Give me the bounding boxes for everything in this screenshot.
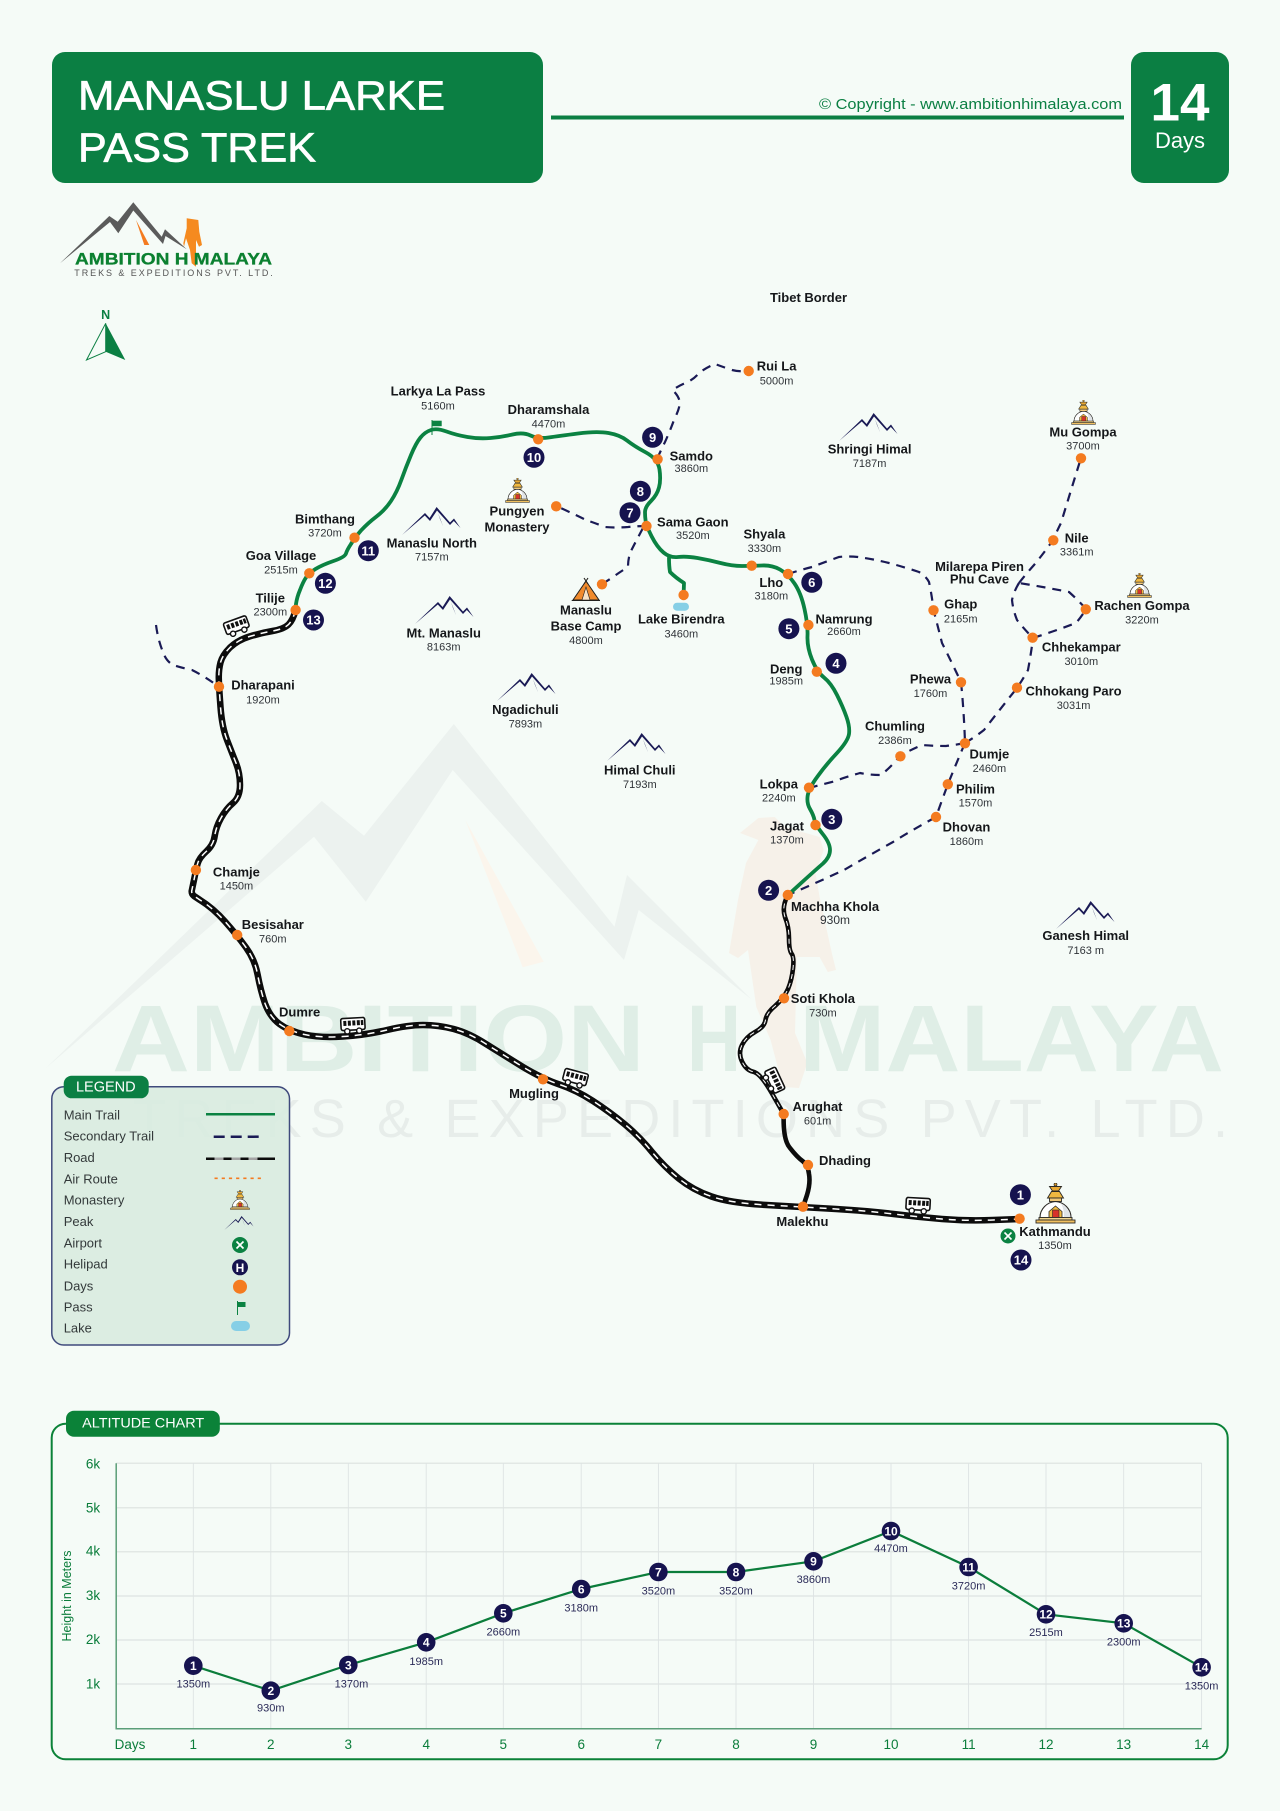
altitude points: 12: [1039, 1608, 1053, 1622]
title banner: MANASLU LARKE: [78, 72, 445, 118]
chart gridlines: [116, 1463, 1202, 1729]
label: Phewa: 1760m: [914, 688, 947, 700]
legend symbols: H: [236, 1261, 244, 1275]
title banner: [52, 52, 543, 183]
label: Ganesh Himal: Ganesh Himal: [1042, 928, 1129, 943]
logo: TREKS & EXPEDITIONS PVT. LTD.: [74, 268, 273, 278]
legend rows text: Pass: [64, 1299, 93, 1314]
label: Chamje: [213, 865, 260, 893]
x axis labels: 6: [577, 1737, 585, 1752]
day badges: 14: [1014, 1253, 1029, 1268]
y axis labels: 6k: [86, 1457, 100, 1472]
altitude values: 1350m: [176, 1678, 210, 1690]
label: Chumling: [865, 719, 925, 747]
x axis labels: 4: [422, 1737, 430, 1752]
label: Shyala: [743, 526, 786, 555]
label: Lokpa: Lokpa: [760, 776, 799, 791]
label: Machha Khola: 930m: [820, 913, 850, 927]
secondary trails: [156, 364, 1086, 895]
y axis labels: 3k: [86, 1588, 100, 1603]
label: Soti Khola: 730m: [809, 1007, 837, 1019]
label: Ganesh Himal: 7163 m: [1067, 945, 1104, 957]
x axis labels: 10: [883, 1737, 899, 1752]
altitude points: 13: [1117, 1617, 1131, 1631]
x axis labels: 13: [1116, 1737, 1131, 1752]
label: Mu Gompa: 3700m: [1066, 440, 1100, 452]
label: Shringi Himal: Shringi Himal: [828, 442, 911, 457]
label: Shyala: 3330m: [748, 543, 781, 555]
label: Dharapani: [231, 677, 295, 706]
altitude points: 1: [190, 1659, 197, 1673]
x axis labels: 9: [810, 1737, 817, 1752]
label: Soti Khola: [791, 991, 856, 1019]
icon: base camp tent: [572, 578, 600, 600]
title banner: PASS TREK: [78, 124, 316, 170]
label: Rui La: [757, 359, 797, 388]
watermark: mountain: [46, 724, 751, 1068]
label: Goa Village: [246, 548, 316, 576]
label: Manaslu North: Manaslu North: [387, 535, 477, 550]
label: Tilije: [253, 590, 287, 619]
label: Mu Gompa: Mu Gompa: [1049, 424, 1117, 439]
label: Besisahar: [242, 917, 304, 946]
label: Philim: Philim: [956, 781, 995, 796]
day badges: 12: [318, 576, 333, 591]
day badges: 7: [626, 505, 634, 520]
north arrow: N: [101, 308, 110, 322]
label: Namrung: [815, 611, 873, 638]
label: Jagat: Jagat: [770, 818, 805, 833]
label: Phewa: Phewa: [910, 672, 952, 687]
label: Dharamshala: Dharamshala: [508, 402, 590, 417]
altitude values: 3520m: [719, 1586, 753, 1598]
label: Lake Birendra: [638, 611, 725, 640]
chart tab: ALTITUDE CHART: [82, 1416, 204, 1431]
label: Sama Gaon: [657, 514, 729, 542]
x axis labels: 5: [500, 1737, 507, 1752]
label: Dhovan: [943, 820, 990, 848]
legend rows text: Helipad: [64, 1256, 108, 1271]
label: Chhokang Paro: Chhokang Paro: [1026, 684, 1122, 699]
altitude values: 2660m: [486, 1627, 520, 1639]
label: Kathmandu: 1350m: [1038, 1240, 1072, 1252]
label: Sama Gaon: 3520m: [676, 530, 710, 542]
legend symbols: [206, 1114, 275, 1331]
altitude points: 11: [962, 1560, 975, 1574]
label: Arughat: 601m: [804, 1115, 831, 1127]
label: Larkya La Pass: Larkya La Pass: [391, 384, 485, 399]
day badges: 3: [828, 812, 835, 827]
label: Samdo: [670, 448, 713, 475]
label: Milarepa Piren Phu Cave: Phu Cave: [950, 572, 1009, 587]
days badge: [1131, 52, 1229, 183]
altitude values: [176, 1543, 1218, 1714]
days badge: Days: [1155, 128, 1205, 153]
copyright text: © Copyright - www.ambitionhimalaya.com: [819, 96, 1122, 113]
chart tab: [66, 1411, 220, 1437]
label: Larkya La Pass: [391, 384, 485, 412]
label: Namrung: Namrung: [815, 611, 873, 626]
label: Chamje: 1450m: [220, 881, 253, 893]
label: Ngadichuli: [492, 702, 559, 731]
altitude values: 2515m: [1029, 1627, 1063, 1639]
altitude points: 4: [423, 1636, 430, 1650]
label: Mt. Manaslu: Mt. Manaslu: [406, 625, 481, 640]
y axis labels: Height in Meters: [60, 1550, 74, 1642]
north arrow: [86, 308, 125, 360]
watermark: company subtitle: TREKS & EXPEDITIONS PVT. LTD.: [133, 1089, 1228, 1149]
icons: peaks: [402, 413, 1114, 929]
label: Lho: [754, 575, 788, 603]
icon: pass flag: [432, 420, 442, 435]
logo: [60, 202, 273, 278]
legend rows text: Monastery: [64, 1193, 125, 1208]
legend rows text: Secondary Trail: [64, 1129, 154, 1144]
altitude points: 7: [655, 1565, 662, 1579]
day badges: 4: [832, 656, 840, 671]
label: Shyala: Shyala: [743, 526, 786, 541]
label: Lokpa: 2240m: [762, 793, 796, 805]
watermark: company name: MALAYA: [799, 986, 1224, 1092]
label: Samdo: Samdo: [670, 448, 713, 463]
label: Philim: 1570m: [959, 798, 992, 810]
label: Dumje: 2460m: [973, 763, 1006, 775]
altitude values: 3860m: [797, 1574, 830, 1586]
altitude points: 5: [500, 1607, 507, 1621]
legend rows text: Road: [64, 1150, 95, 1165]
x axis labels: 12: [1038, 1737, 1054, 1752]
label: Namrung: 2660m: [827, 626, 861, 638]
x axis labels: 11: [962, 1737, 976, 1752]
label: Milarepa Piren Phu Cave: [935, 559, 1024, 587]
label: Rachen Gompa: [1094, 598, 1190, 627]
label: Lho: Lho: [759, 575, 783, 590]
watermark: company name: [112, 986, 1224, 1092]
label: Dharapani: Dharapani: [231, 677, 295, 692]
label: Machha Khola: Machha Khola: [791, 899, 880, 914]
x axis labels: 14: [1194, 1737, 1210, 1752]
legend tab: [64, 1076, 149, 1098]
y axis labels: 4k: [86, 1544, 100, 1559]
watermark: company name: AMBITION: [112, 986, 645, 1092]
label: Besisahar: Besisahar: [242, 917, 304, 932]
label: Deng: Deng: [770, 662, 803, 677]
label: Nile: Nile: [1065, 531, 1089, 546]
label: Deng: [769, 662, 803, 688]
altitude values: 2300m: [1107, 1636, 1141, 1648]
label: Dumje: [970, 746, 1009, 775]
label: Besisahar: 760m: [259, 934, 287, 946]
label: Dharapani: 1920m: [246, 694, 280, 706]
label: Manaslu Base Camp: Manaslu: [560, 603, 612, 618]
label: Mt. Manaslu: 8163m: [427, 642, 461, 654]
logo: AMBITION H MALAYA: [75, 249, 272, 268]
legend rows text: [64, 1107, 154, 1336]
panel: legend: [52, 1076, 289, 1345]
label: Manaslu Base Camp: Base Camp: [551, 619, 621, 634]
label: Chhokang Paro: 3031m: [1057, 700, 1090, 712]
x axis labels: 3: [345, 1737, 352, 1752]
label: Arughat: Arughat: [793, 1099, 843, 1114]
label: Bimthang: 3720m: [308, 528, 342, 540]
day badges: 2: [765, 883, 772, 898]
altitude points: 9: [810, 1555, 817, 1569]
label: Milarepa Piren Phu Cave: Milarepa Piren: [935, 559, 1024, 574]
label: Himal Chuli: [604, 762, 676, 791]
label: Shringi Himal: [828, 442, 911, 470]
label: Lake Birendra: 3460m: [664, 628, 698, 640]
altitude points: 6: [578, 1582, 585, 1596]
label: Chhokang Paro: [1026, 684, 1122, 712]
label: Rui La: 5000m: [760, 376, 793, 388]
label: Deng: 1985m: [769, 676, 803, 688]
watermark: company name: H: [687, 986, 741, 1092]
day badges: 11: [361, 543, 375, 558]
label: Ghap: Ghap: [944, 597, 977, 612]
y axis labels: 1k: [86, 1677, 100, 1692]
label: Ganesh Himal: [1042, 928, 1129, 957]
x axis labels: 8: [732, 1737, 740, 1752]
y axis labels: 5k: [86, 1501, 100, 1516]
altitude values: 930m: [257, 1702, 285, 1714]
altitude points: 2: [267, 1684, 274, 1698]
y axis labels: [60, 1457, 100, 1692]
y axis labels: 2k: [86, 1632, 100, 1647]
label: Jagat: [770, 818, 805, 846]
label: Dumre: Dumre: [279, 1004, 320, 1019]
label: Bimthang: [295, 511, 355, 540]
label: Chhekampar: Chhekampar: [1042, 639, 1121, 654]
label: Nile: 3361m: [1060, 547, 1094, 559]
label: Philim: [956, 781, 995, 810]
label: Dharamshala: 4470m: [532, 418, 565, 430]
label: Manaslu Base Camp: 4800m: [569, 635, 603, 647]
main trail: [296, 429, 849, 895]
label: Chumling: 2386m: [878, 735, 912, 747]
legend rows text: Main Trail: [64, 1107, 120, 1122]
label: Ghap: 2165m: [944, 613, 978, 625]
x axis labels: 2: [267, 1737, 275, 1752]
main road: [192, 610, 1020, 1220]
label: Jagat: 1370m: [770, 834, 804, 846]
route stops: [191, 366, 1091, 1224]
label: Ngadichuli: Ngadichuli: [492, 702, 559, 717]
legend rows text: Air Route: [64, 1171, 118, 1186]
label: Mt. Manaslu: [406, 625, 481, 654]
day badges: 6: [808, 575, 815, 590]
label: Kathmandu: [1019, 1224, 1091, 1252]
day badges: 10: [527, 450, 541, 465]
icons: monasteries: [506, 400, 1151, 1223]
altitude points: [184, 1522, 1211, 1700]
label: Manaslu North: 7157m: [415, 552, 449, 564]
altitude values: 3520m: [642, 1585, 675, 1597]
label: Dharamshala: [508, 402, 590, 430]
label: Chamje: Chamje: [213, 865, 260, 880]
label: Chhekampar: [1042, 639, 1121, 668]
altitude values: 3180m: [564, 1603, 598, 1615]
altitude points: 8: [733, 1565, 740, 1579]
label: Pungyen Monastery: Monastery: [484, 519, 550, 534]
altitude values: 1350m: [1185, 1680, 1218, 1692]
label: Soti Khola: Soti Khola: [791, 991, 856, 1006]
icons: buses: [223, 615, 930, 1214]
day badges: [303, 427, 1032, 1270]
label: Lokpa: [760, 776, 799, 805]
label: Rachen Gompa: Rachen Gompa: [1094, 598, 1190, 613]
days badge: 14: [1151, 74, 1210, 133]
label: Chumling: Chumling: [865, 719, 925, 734]
legend rows text: Lake: [64, 1321, 92, 1336]
day badges: 1: [1017, 1187, 1024, 1202]
label: Manaslu Base Camp: [551, 603, 621, 647]
label: Nile: [1060, 531, 1094, 559]
label: Goa Village: Goa Village: [246, 548, 316, 563]
label: Goa Village: 2515m: [264, 564, 298, 576]
label: Lho: 3180m: [754, 591, 788, 603]
label: Himal Chuli: 7193m: [623, 779, 657, 791]
legend rows text: Airport: [64, 1235, 102, 1250]
altitude values: 1985m: [409, 1656, 443, 1668]
label: Malekhu: Malekhu: [776, 1214, 828, 1229]
panel: altitude chart: [52, 1411, 1228, 1759]
side road: [740, 895, 809, 1207]
label: Bimthang: Bimthang: [295, 511, 355, 526]
label: Kathmandu: Kathmandu: [1019, 1224, 1091, 1239]
legend tab: LEGEND: [76, 1080, 136, 1096]
day badges: 5: [785, 621, 793, 636]
label: Lake Birendra: Lake Birendra: [638, 611, 725, 626]
label: Rui La: Rui La: [757, 359, 797, 374]
label: Manaslu North: [387, 535, 477, 564]
label: Ngadichuli: 7893m: [509, 719, 542, 731]
label: Rachen Gompa: 3220m: [1125, 615, 1159, 627]
legend rows text: Days: [64, 1278, 94, 1293]
label: Himal Chuli: Himal Chuli: [604, 762, 676, 777]
altitude points: 3: [345, 1658, 352, 1672]
label: Tilije: Tilije: [256, 590, 285, 605]
label: Pungyen Monastery: Pungyen: [490, 504, 545, 519]
label: Tibet Border: Tibet Border: [770, 290, 847, 305]
label: Samdo: 3860m: [674, 463, 708, 475]
label: Chhekampar: 3010m: [1064, 656, 1098, 668]
label: Pungyen Monastery: [484, 504, 550, 534]
day badges: 9: [649, 430, 656, 445]
altitude values: 4470m: [874, 1543, 908, 1555]
label: Machha Khola: [791, 899, 880, 927]
day badges: 13: [306, 613, 321, 628]
label: Shringi Himal: 7187m: [853, 458, 886, 470]
label: Larkya La Pass: 5160m: [421, 400, 455, 412]
altitude values: 3720m: [952, 1580, 985, 1592]
label: Mu Gompa: [1049, 424, 1117, 452]
label: Phewa: [910, 672, 952, 700]
icon: airport at Kathmandu: [1000, 1228, 1016, 1244]
label: Mugling: Mugling: [509, 1086, 559, 1101]
label: Ghap: [944, 597, 978, 625]
x axis labels: Days: [115, 1737, 146, 1752]
x axis labels: 1: [190, 1737, 197, 1752]
label: Sama Gaon: Sama Gaon: [657, 514, 729, 529]
altitude values: 1370m: [335, 1678, 368, 1690]
header rule: [551, 116, 1124, 120]
legend rows text: Peak: [64, 1214, 94, 1229]
label: Dumje: Dumje: [970, 746, 1009, 761]
x axis labels: [115, 1737, 1210, 1752]
day badges: 8: [637, 484, 644, 499]
x axis labels: 7: [655, 1737, 662, 1752]
label: Arughat: [793, 1099, 843, 1127]
label: Tilije: 2300m: [253, 607, 287, 619]
label: Dhovan: 1860m: [950, 836, 983, 848]
label: Dhading: Dhading: [819, 1153, 871, 1168]
icon: lake Birendra: [673, 603, 689, 611]
watermark: hiker silhouette: [729, 817, 836, 1088]
altitude points: 14: [1195, 1661, 1209, 1675]
altitude line: [193, 1531, 1202, 1691]
altitude points: 10: [884, 1524, 898, 1538]
label: Dhovan: Dhovan: [943, 820, 990, 835]
